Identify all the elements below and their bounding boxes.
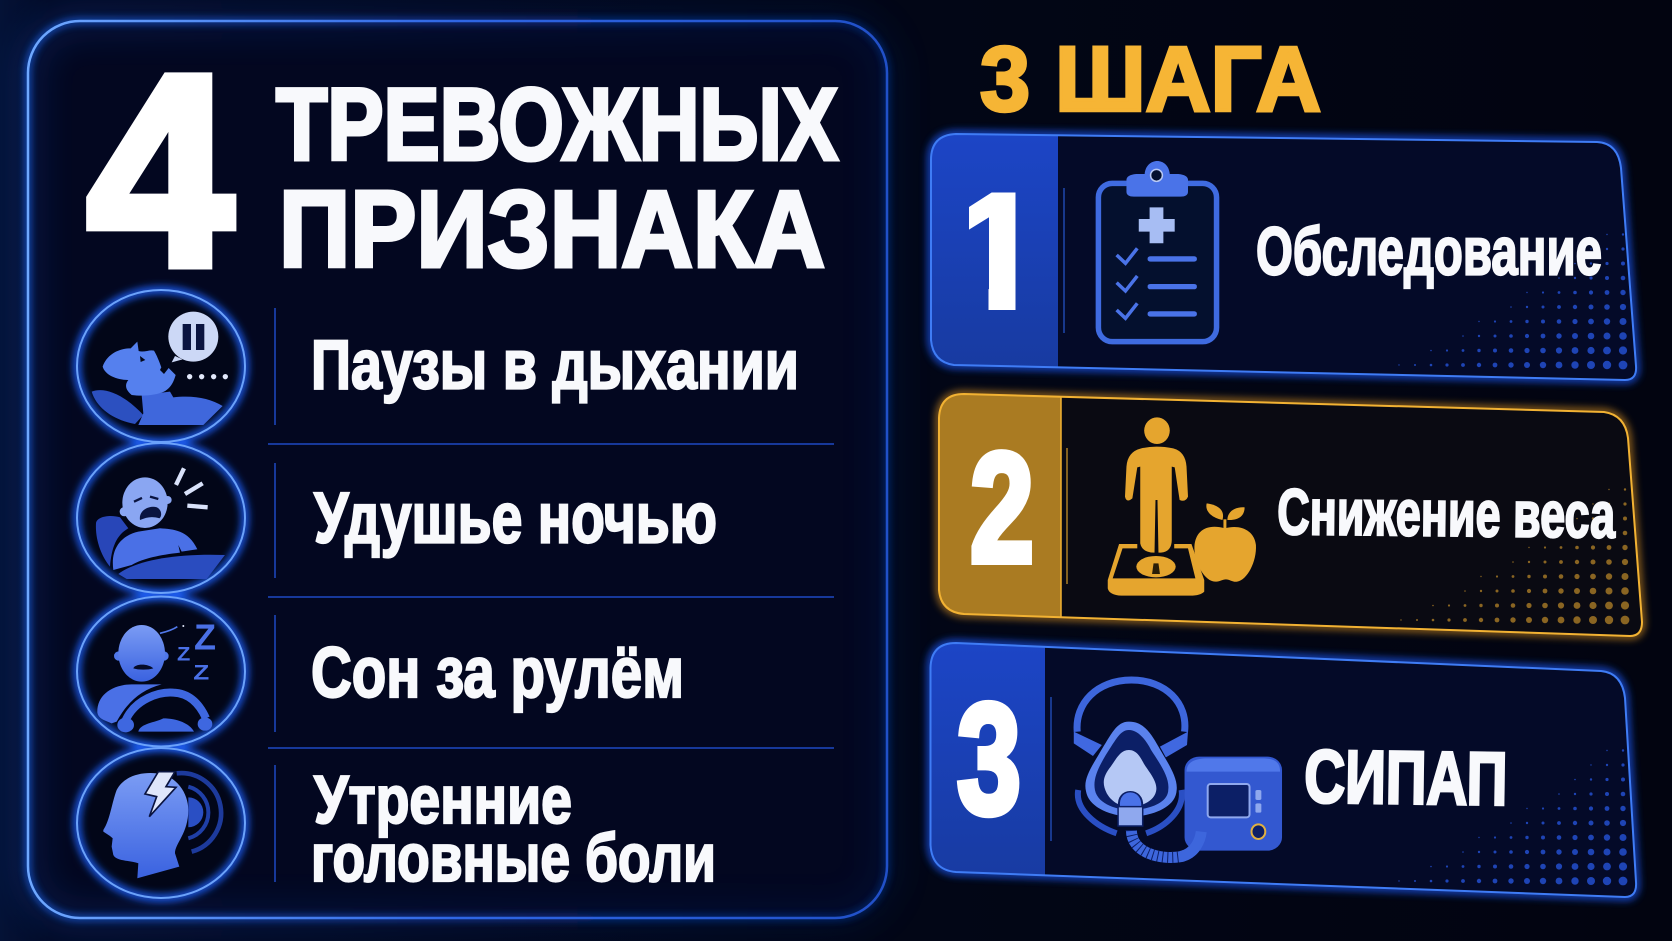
icon: choking at night	[96, 468, 225, 579]
panel: warning signs	[28, 18, 887, 918]
icon: breathing pause	[92, 312, 228, 425]
heading line one: ТРЕВОЖНЫХ	[276, 68, 838, 182]
icon: asleep at the wheel	[97, 616, 216, 732]
sign label: breathing pauses: Паузы в дыхании	[311, 326, 799, 404]
icon: asleep at the wheel: Z	[194, 616, 216, 657]
icon: morning headache	[103, 772, 221, 878]
sign label: sleep at wheel: Сон за рулём	[311, 634, 684, 713]
card: step 2	[939, 394, 1642, 636]
icon: clipboard	[1098, 161, 1217, 342]
step label: CPAP: СИПАП	[1304, 734, 1508, 821]
icon: CPAP mask and machine	[1074, 680, 1282, 857]
step number 3: 3	[957, 672, 1021, 847]
heading line two: ПРИЗНАКА	[279, 168, 825, 290]
sign label: morning headaches	[311, 762, 716, 896]
icon: asleep at the wheel: Z	[193, 660, 209, 684]
heading: three steps: 3 ШАГА	[980, 28, 1321, 130]
card: step 1	[931, 134, 1636, 380]
big number 4: 4	[87, 18, 235, 322]
step number 2: 2	[970, 422, 1034, 596]
circle frames	[77, 290, 245, 898]
step number 1: 1	[952, 159, 1045, 343]
icon: asleep at the wheel: Z	[177, 645, 191, 666]
sign label: morning headaches: головные боли	[311, 820, 716, 896]
card: step 3	[930, 643, 1636, 897]
sign label: morning headaches: Утренние	[314, 762, 572, 838]
icon: person on scale with apple	[1108, 417, 1256, 596]
sign label: choking at night: Удушье ночью	[314, 480, 717, 558]
